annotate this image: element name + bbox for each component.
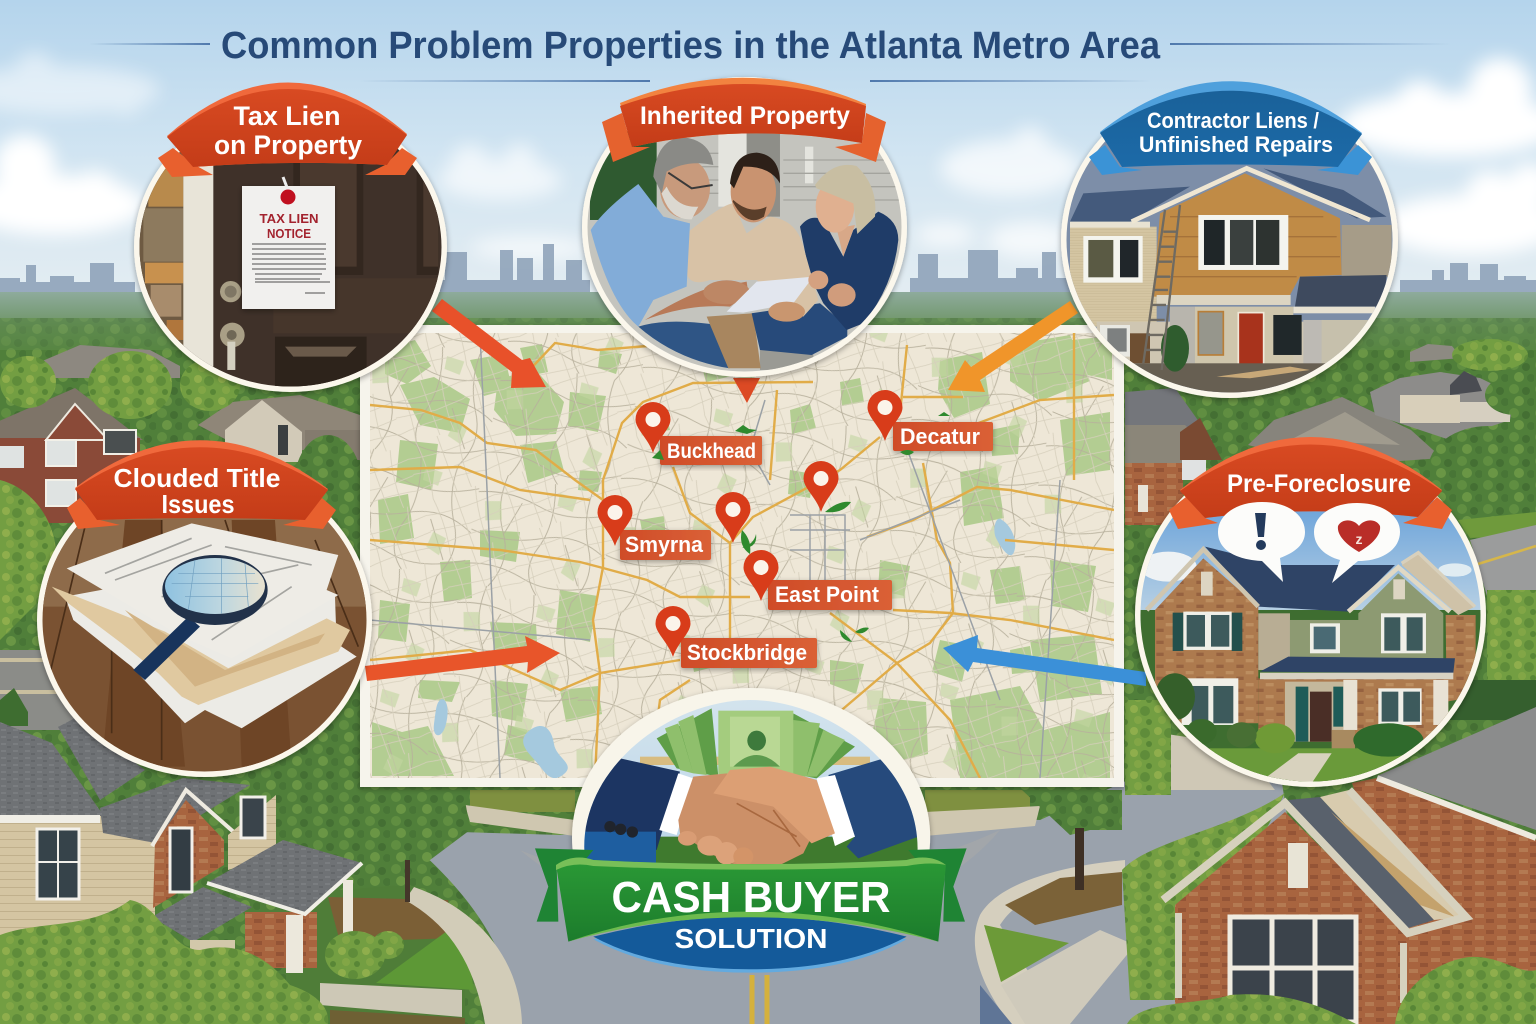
location: Stockbridge (656, 606, 817, 668)
left upper houses (0, 345, 362, 730)
door scene (140, 148, 442, 386)
map pins and labels (598, 390, 993, 668)
fan of dollar bills (657, 708, 855, 778)
ribbon: inherited property (602, 78, 886, 162)
ribbon: pre-foreclosure (1169, 437, 1452, 529)
lakes (434, 519, 1015, 778)
location: Smyrna (598, 495, 711, 560)
shaking hands (678, 773, 810, 868)
ribbon: contractor liens: Unfinished Repairs (1139, 132, 1333, 157)
title: Common Problem Properties in the Atlanta Metro Area (221, 25, 1161, 67)
ribbon: clouded title: Issues (162, 489, 234, 519)
location: Stockbridge: Stockbridge (687, 640, 807, 665)
highways (370, 333, 1114, 778)
sky behind handshake (584, 700, 918, 850)
speech bubble: alert (1218, 502, 1305, 582)
location: East Point (744, 550, 892, 610)
banner: cash buyer solution (535, 848, 967, 973)
panel: cash buyer solution (535, 680, 967, 973)
right upper houses and trees (1125, 339, 1536, 720)
people: three family members reading a document (591, 137, 898, 370)
ribbon: clouded title: Clouded Title (114, 463, 280, 493)
porch background (588, 132, 902, 372)
paper stack (66, 590, 356, 728)
ribbon: contractor liens (1089, 81, 1372, 175)
shirt cuffs (659, 773, 855, 846)
lower-left trees and shrubs (0, 900, 404, 1024)
speech bubble: broken heart: z (1356, 531, 1362, 547)
lower-left front yard (280, 725, 522, 1024)
location: Buckhead: Buckhead (667, 440, 756, 463)
map parks (372, 335, 1112, 778)
wooden table (42, 522, 366, 772)
clouds (0, 52, 1536, 260)
panel: clouded title issues (25, 440, 385, 777)
ribbon: tax lien (158, 82, 417, 177)
small leaves on map (652, 412, 950, 642)
ribbon: tax lien: Tax Lien (234, 101, 340, 131)
location: Decatur: Decatur (900, 424, 980, 449)
notice paper (242, 177, 335, 309)
map of Atlanta metro (360, 325, 1124, 787)
house scene (1140, 500, 1480, 630)
location: unnamed north-central pin (804, 461, 838, 512)
arrow: clouded title to map (365, 636, 560, 681)
location: unnamed central pin (716, 492, 750, 543)
ribbon: pre-foreclosure: Pre-Foreclosure (1227, 470, 1411, 498)
left suit sleeve (584, 755, 680, 850)
location: East Point: East Point (775, 582, 880, 607)
magnifying glass (133, 555, 268, 680)
neighborhood tree base (0, 350, 1536, 1024)
grey arterials (370, 333, 1060, 778)
panel: tax lien on property (130, 82, 460, 403)
arrow: pre-foreclosure to map (943, 635, 1146, 686)
city skyline (0, 244, 1536, 295)
fine road mesh (370, 333, 1114, 778)
sky and unfinished house (1066, 141, 1392, 392)
banner text: cash buyer: CASH BUYER (612, 873, 890, 922)
notice paper: NOTICE (267, 226, 311, 241)
location: Decatur (868, 390, 993, 451)
lower-right house and trees (1022, 700, 1536, 1024)
location: Buckhead (636, 402, 762, 465)
street and intersection (395, 733, 1300, 1024)
notice paper: TAX LIEN (260, 211, 318, 226)
right suit sleeve (828, 755, 919, 858)
background: sky (0, 0, 1536, 320)
arrow: inherited property to map (733, 378, 760, 403)
speech bubble: broken heart (1314, 503, 1400, 583)
ribbon: tax lien: on Property (214, 130, 362, 160)
location: Smyrna: Smyrna (625, 532, 704, 557)
panel: inherited property (570, 77, 920, 377)
lower-left house (0, 718, 362, 975)
ribbon: contractor liens: Contractor Liens / (1147, 108, 1319, 133)
distant tree band (0, 292, 1536, 362)
panel: pre-foreclosure (1125, 437, 1495, 790)
ribbon: clouded title (67, 440, 336, 529)
ribbon: inherited property: Inherited Property (640, 102, 850, 130)
panel: contractor liens and unfinished repairs (1050, 81, 1410, 403)
banner text: solution: SOLUTION (674, 923, 828, 954)
arrow: tax lien to map (432, 299, 546, 388)
arrow: contractor liens to map (948, 301, 1078, 392)
